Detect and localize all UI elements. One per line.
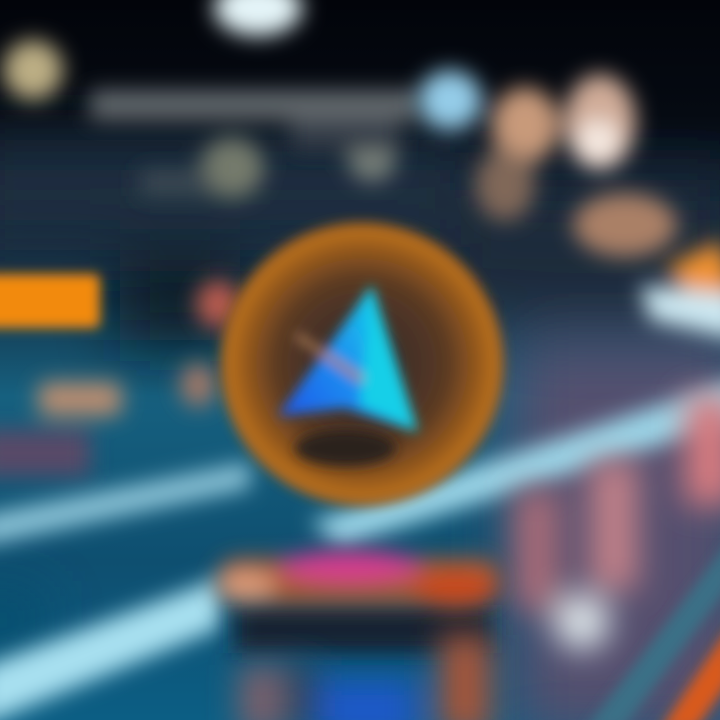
right orange flare: [640, 240, 720, 340]
pedestal dark body: [235, 605, 490, 653]
left small label blobs: [0, 280, 240, 476]
pedestal lower reflections: [240, 635, 490, 720]
blurred headline band: [90, 90, 420, 198]
right red and pink columns: [515, 395, 720, 650]
icon: blue triangle: [278, 285, 418, 432]
emblem: orange coin: [220, 222, 504, 506]
light streaks: [0, 378, 720, 720]
top moon glow: [214, 0, 302, 36]
upper right bokeh lights: [418, 70, 677, 257]
left orange bar: [0, 274, 100, 328]
pedestal colorful rim: [215, 551, 500, 608]
coin base shadow: [295, 430, 395, 466]
pedestal: [215, 551, 500, 720]
bottom right diagonal beams: [585, 540, 720, 720]
top left bokeh light: [3, 40, 63, 100]
